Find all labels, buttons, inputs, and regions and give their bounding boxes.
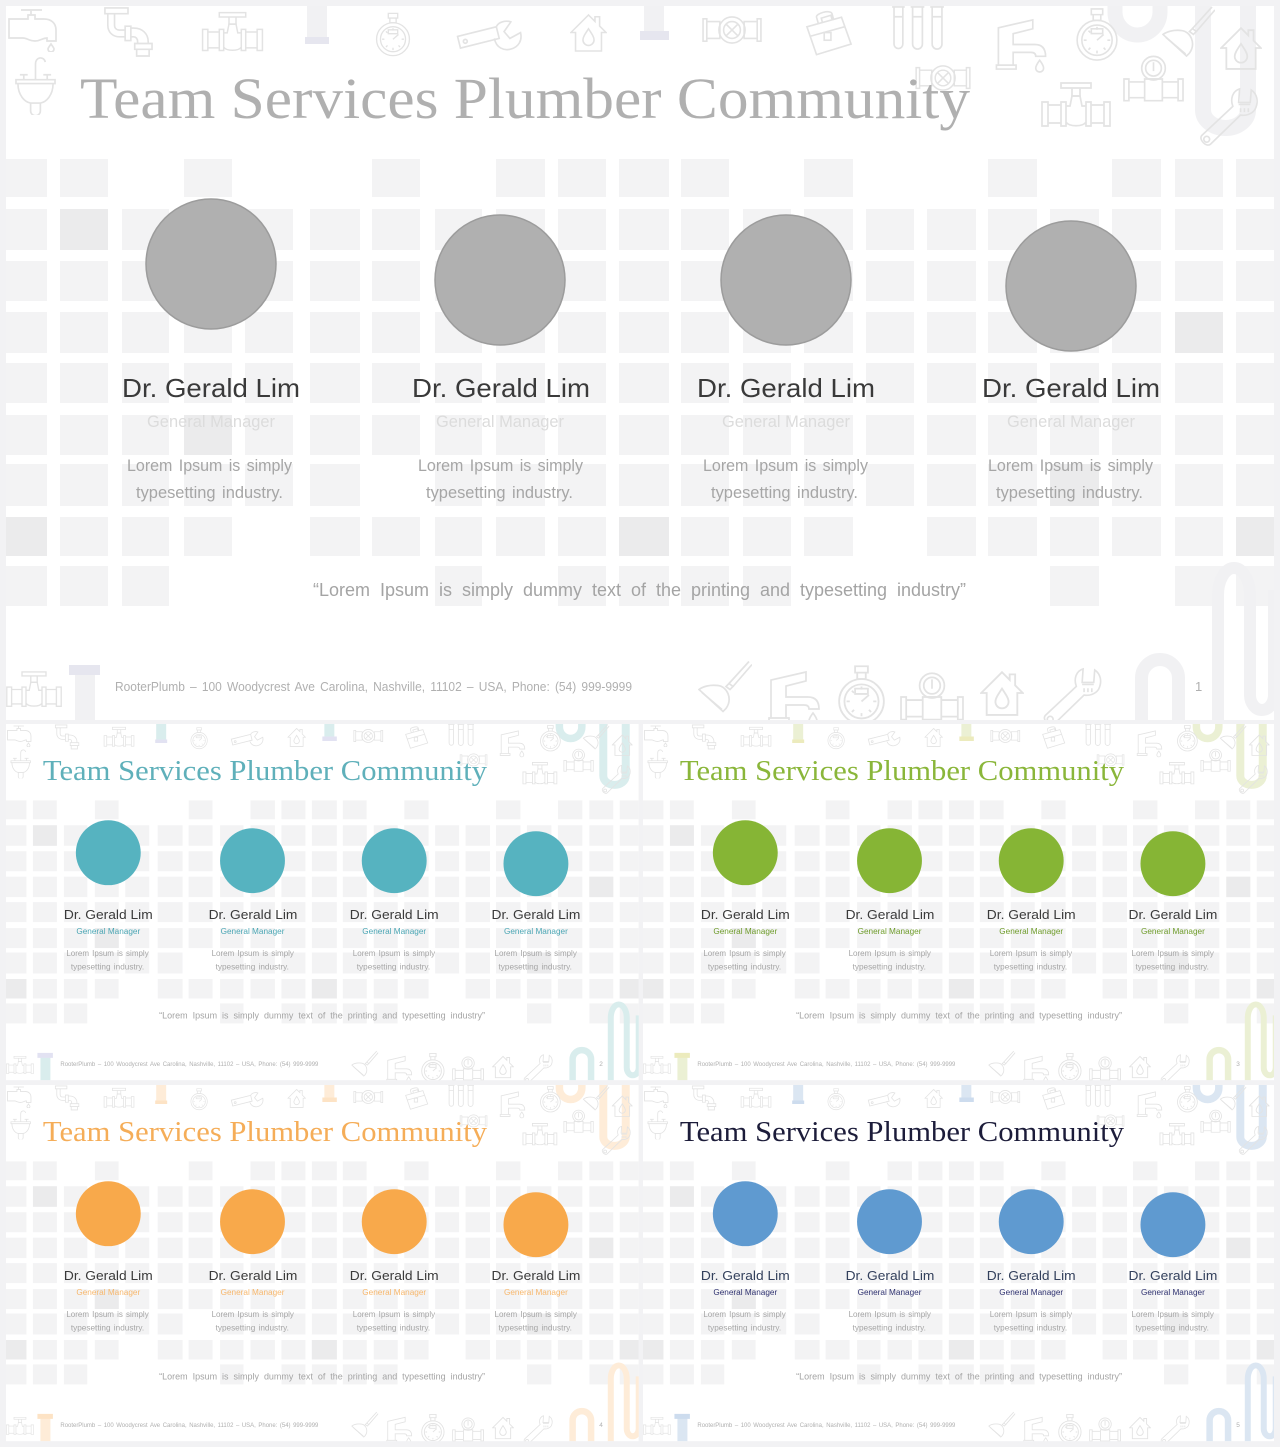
title: Team Services Plumber Community	[43, 755, 488, 787]
team member text: General Manager	[1141, 1287, 1205, 1297]
team member 3	[697, 373, 875, 502]
team member text: typesetting industry.	[853, 962, 926, 972]
team member 3: Dr. Gerald Lim	[697, 373, 875, 403]
team member text	[64, 907, 580, 972]
quote: “Lorem Ipsum is simply dummy text of the printing and typesetting industry”	[159, 1371, 485, 1381]
team member text: Dr. Gerald Lim	[1129, 1268, 1217, 1283]
team member 1: General Manager	[147, 412, 275, 431]
team member 2: General Manager	[436, 412, 564, 431]
team member 2	[412, 373, 590, 502]
footer address: RooterPlumb – 100 Woodycrest Ave Carolina, Nashville, 11102 – USA, Phone: (54) 999-9999	[60, 1422, 319, 1429]
team member text: typesetting industry.	[994, 1323, 1067, 1333]
team member text: General Manager	[76, 926, 140, 936]
page number: 5	[1236, 1422, 1240, 1429]
team member text: Dr. Gerald Lim	[987, 1268, 1076, 1283]
team member 1: Dr. Gerald Lim	[122, 373, 300, 403]
team member text	[701, 1268, 1217, 1333]
team member text: General Manager	[504, 1287, 568, 1297]
page number: 1	[1195, 679, 1202, 694]
portrait circles	[76, 820, 568, 896]
title: Team Services Plumber Community	[680, 1116, 1125, 1148]
footer address: RooterPlumb – 100 Woodycrest Ave Carolina, Nashville, 11102 – USA, Phone: (54) 999-9999	[115, 679, 632, 694]
team member text: typesetting industry.	[357, 1323, 430, 1333]
team member 2: typesetting industry.	[426, 483, 573, 502]
plumbing icon set	[643, 1085, 1269, 1444]
portrait circles	[713, 820, 1205, 896]
team member text: Dr. Gerald Lim	[350, 907, 439, 922]
team member text: General Manager	[858, 926, 922, 936]
team member text: typesetting industry.	[994, 962, 1067, 972]
team member text: General Manager	[999, 926, 1063, 936]
team member text: Dr. Gerald Lim	[209, 907, 297, 922]
team member text: typesetting industry.	[708, 1323, 781, 1333]
team member text	[701, 907, 1217, 972]
plumbing icon set	[643, 724, 1269, 1083]
team member text: General Manager	[713, 1287, 777, 1297]
pipe caps	[37, 736, 337, 1058]
team member text: Lorem Ipsum is simply	[703, 1309, 786, 1319]
team member text: Lorem Ipsum is simply	[495, 948, 578, 958]
team member 3: General Manager	[722, 412, 850, 431]
team member text: Lorem Ipsum is simply	[212, 1309, 295, 1319]
team member text: typesetting industry.	[853, 1323, 926, 1333]
portrait circles	[713, 1181, 1205, 1257]
team member text: Dr. Gerald Lim	[492, 1268, 580, 1283]
panel: teal slide	[6, 724, 639, 1083]
team member 2: Lorem Ipsum is simply	[418, 456, 583, 475]
portrait circles	[76, 1181, 568, 1257]
team member text	[64, 1268, 580, 1333]
team member text: typesetting industry.	[216, 1323, 289, 1333]
team member text: General Manager	[1141, 926, 1205, 936]
plumbing icon set	[6, 724, 632, 1083]
pipe caps	[674, 736, 974, 1058]
team member text: Lorem Ipsum is simply	[990, 1309, 1073, 1319]
team member text: Dr. Gerald Lim	[350, 1268, 439, 1283]
team member text: Lorem Ipsum is simply	[849, 948, 932, 958]
quote: “Lorem Ipsum is simply dummy text of the printing and typesetting industry”	[796, 1371, 1122, 1381]
team member text: Lorem Ipsum is simply	[1132, 948, 1215, 958]
team member text: Lorem Ipsum is simply	[212, 948, 295, 958]
page number: 3	[1236, 1061, 1240, 1068]
plumbing icon set	[7, 7, 1261, 725]
team member text: General Manager	[221, 926, 285, 936]
team member 3: Lorem Ipsum is simply	[703, 456, 868, 475]
team member 4: General Manager	[1007, 412, 1135, 431]
footer address: RooterPlumb – 100 Woodycrest Ave Carolina, Nashville, 11102 – USA, Phone: (54) 999-9999	[697, 1061, 956, 1068]
team member 1	[122, 373, 300, 502]
quote: “Lorem Ipsum is simply dummy text of the printing and typesetting industry”	[159, 1010, 485, 1020]
team member text: typesetting industry.	[499, 1323, 572, 1333]
decorative pipes in grey	[85, 6, 1274, 720]
team member 2: Dr. Gerald Lim	[412, 373, 590, 403]
team member text: Lorem Ipsum is simply	[1132, 1309, 1215, 1319]
team member text: typesetting industry.	[1136, 1323, 1209, 1333]
team member text: typesetting industry.	[216, 962, 289, 972]
portrait circles	[146, 199, 1136, 351]
team member 4	[982, 373, 1160, 502]
team member text: Dr. Gerald Lim	[846, 1268, 934, 1283]
team member text: Lorem Ipsum is simply	[353, 948, 436, 958]
pipe caps	[69, 31, 669, 675]
team member text: typesetting industry.	[499, 962, 572, 972]
pipe caps	[674, 1097, 974, 1419]
quote: “Lorem Ipsum is simply dummy text of the printing and typesetting industry”	[313, 580, 966, 600]
title: Team Services Plumber Community	[43, 1116, 488, 1148]
team member text: Lorem Ipsum is simply	[66, 1309, 149, 1319]
team member text: Dr. Gerald Lim	[64, 907, 153, 922]
team member 4: typesetting industry.	[996, 483, 1143, 502]
team member 4: Dr. Gerald Lim	[982, 373, 1160, 403]
team member text: Lorem Ipsum is simply	[849, 1309, 932, 1319]
team member text: typesetting industry.	[357, 962, 430, 972]
team member text: typesetting industry.	[1136, 962, 1209, 972]
team member 1: typesetting industry.	[136, 483, 283, 502]
team member text: General Manager	[362, 926, 426, 936]
team member text: General Manager	[76, 1287, 140, 1297]
green pipes	[682, 724, 1276, 1080]
footer address: RooterPlumb – 100 Woodycrest Ave Carolina, Nashville, 11102 – USA, Phone: (54) 999-9999	[697, 1422, 956, 1429]
quote: “Lorem Ipsum is simply dummy text of the printing and typesetting industry”	[796, 1010, 1122, 1020]
team member text: typesetting industry.	[71, 962, 144, 972]
blue pipes	[682, 1085, 1276, 1441]
team member text: Dr. Gerald Lim	[846, 907, 934, 922]
team member text: Lorem Ipsum is simply	[495, 1309, 578, 1319]
team member text: Lorem Ipsum is simply	[353, 1309, 436, 1319]
team member text: Lorem Ipsum is simply	[66, 948, 149, 958]
panel: blue slide	[643, 1085, 1276, 1444]
team member text: Dr. Gerald Lim	[492, 907, 580, 922]
team member text: General Manager	[221, 1287, 285, 1297]
team member text: Dr. Gerald Lim	[64, 1268, 153, 1283]
panel: green slide	[643, 724, 1276, 1083]
team member text: typesetting industry.	[708, 962, 781, 972]
team member text: Lorem Ipsum is simply	[703, 948, 786, 958]
team member 4: Lorem Ipsum is simply	[988, 456, 1153, 475]
team member text: General Manager	[713, 926, 777, 936]
page number: 4	[599, 1422, 603, 1429]
team member text: General Manager	[504, 926, 568, 936]
team member text: Lorem Ipsum is simply	[990, 948, 1073, 958]
page number: 2	[599, 1061, 603, 1068]
title: Team Services Plumber Community	[80, 66, 970, 131]
title: Team Services Plumber Community	[680, 755, 1125, 787]
team member text: General Manager	[999, 1287, 1063, 1297]
panel: orange slide	[6, 1085, 639, 1444]
footer address: RooterPlumb – 100 Woodycrest Ave Carolina, Nashville, 11102 – USA, Phone: (54) 999-9999	[60, 1061, 319, 1068]
team member text: Dr. Gerald Lim	[701, 907, 790, 922]
pipe caps	[37, 1097, 337, 1419]
team member text: Dr. Gerald Lim	[701, 1268, 790, 1283]
team member text: General Manager	[858, 1287, 922, 1297]
team member text: Dr. Gerald Lim	[1129, 907, 1217, 922]
panel: large grey slide	[6, 6, 1274, 725]
plumbing icon set	[6, 1085, 632, 1444]
team member 3: typesetting industry.	[711, 483, 858, 502]
orange pipes	[45, 1085, 639, 1441]
team member 1: Lorem Ipsum is simply	[127, 456, 292, 475]
team member text: General Manager	[362, 1287, 426, 1297]
teal pipes	[45, 724, 639, 1080]
team member text: typesetting industry.	[71, 1323, 144, 1333]
team member text: Dr. Gerald Lim	[209, 1268, 297, 1283]
team member text: Dr. Gerald Lim	[987, 907, 1076, 922]
